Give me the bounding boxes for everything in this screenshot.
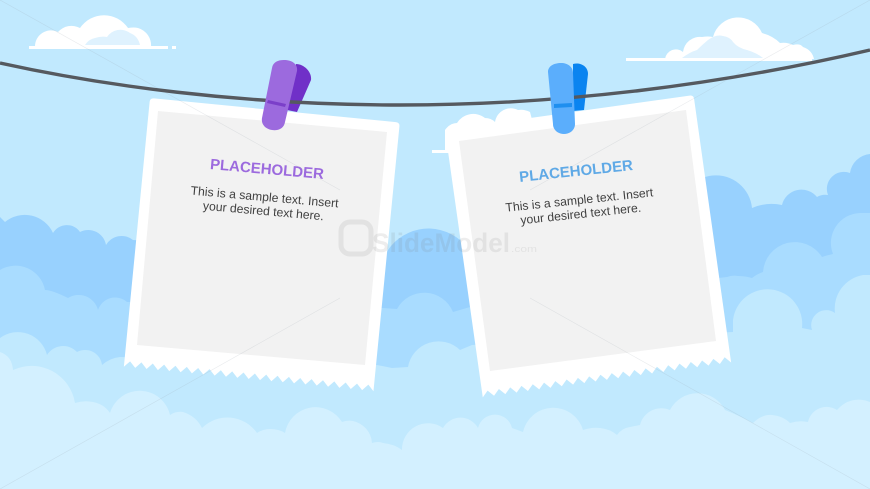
card 1 photo area [137, 111, 387, 365]
watermark [341, 222, 537, 258]
blue clothespin front [548, 63, 575, 134]
card 2 paper [445, 95, 731, 397]
cloud: top right [626, 17, 814, 61]
card 2 body text: This is a sample text. Insert [505, 185, 654, 215]
card 1 heading: PLACEHOLDER [209, 156, 325, 183]
card 1 [124, 98, 400, 391]
clothesline [0, 50, 870, 105]
card 2 [445, 95, 731, 397]
purple clothespin front [262, 60, 297, 130]
middle cloud layer [0, 213, 870, 430]
front cloud layer [0, 352, 870, 489]
watermark: .com [511, 244, 537, 254]
card 2 heading: PLACEHOLDER [518, 157, 634, 186]
card 1 body text: This is a sample text. Insert [190, 184, 340, 211]
pale cloud layer [0, 275, 870, 489]
back cloud layer [0, 154, 870, 420]
card 1 body text: your desired text here. [202, 199, 324, 223]
blue clothespin back [573, 63, 588, 111]
purple clothespin back [287, 64, 311, 112]
watermark: SlideModel [372, 228, 510, 258]
card 1 paper [124, 98, 400, 391]
card 2 body text: your desired text here. [520, 201, 642, 227]
cloud: behind right card [432, 108, 540, 153]
cloud: top left [29, 15, 176, 49]
card 2 photo area [459, 110, 716, 371]
